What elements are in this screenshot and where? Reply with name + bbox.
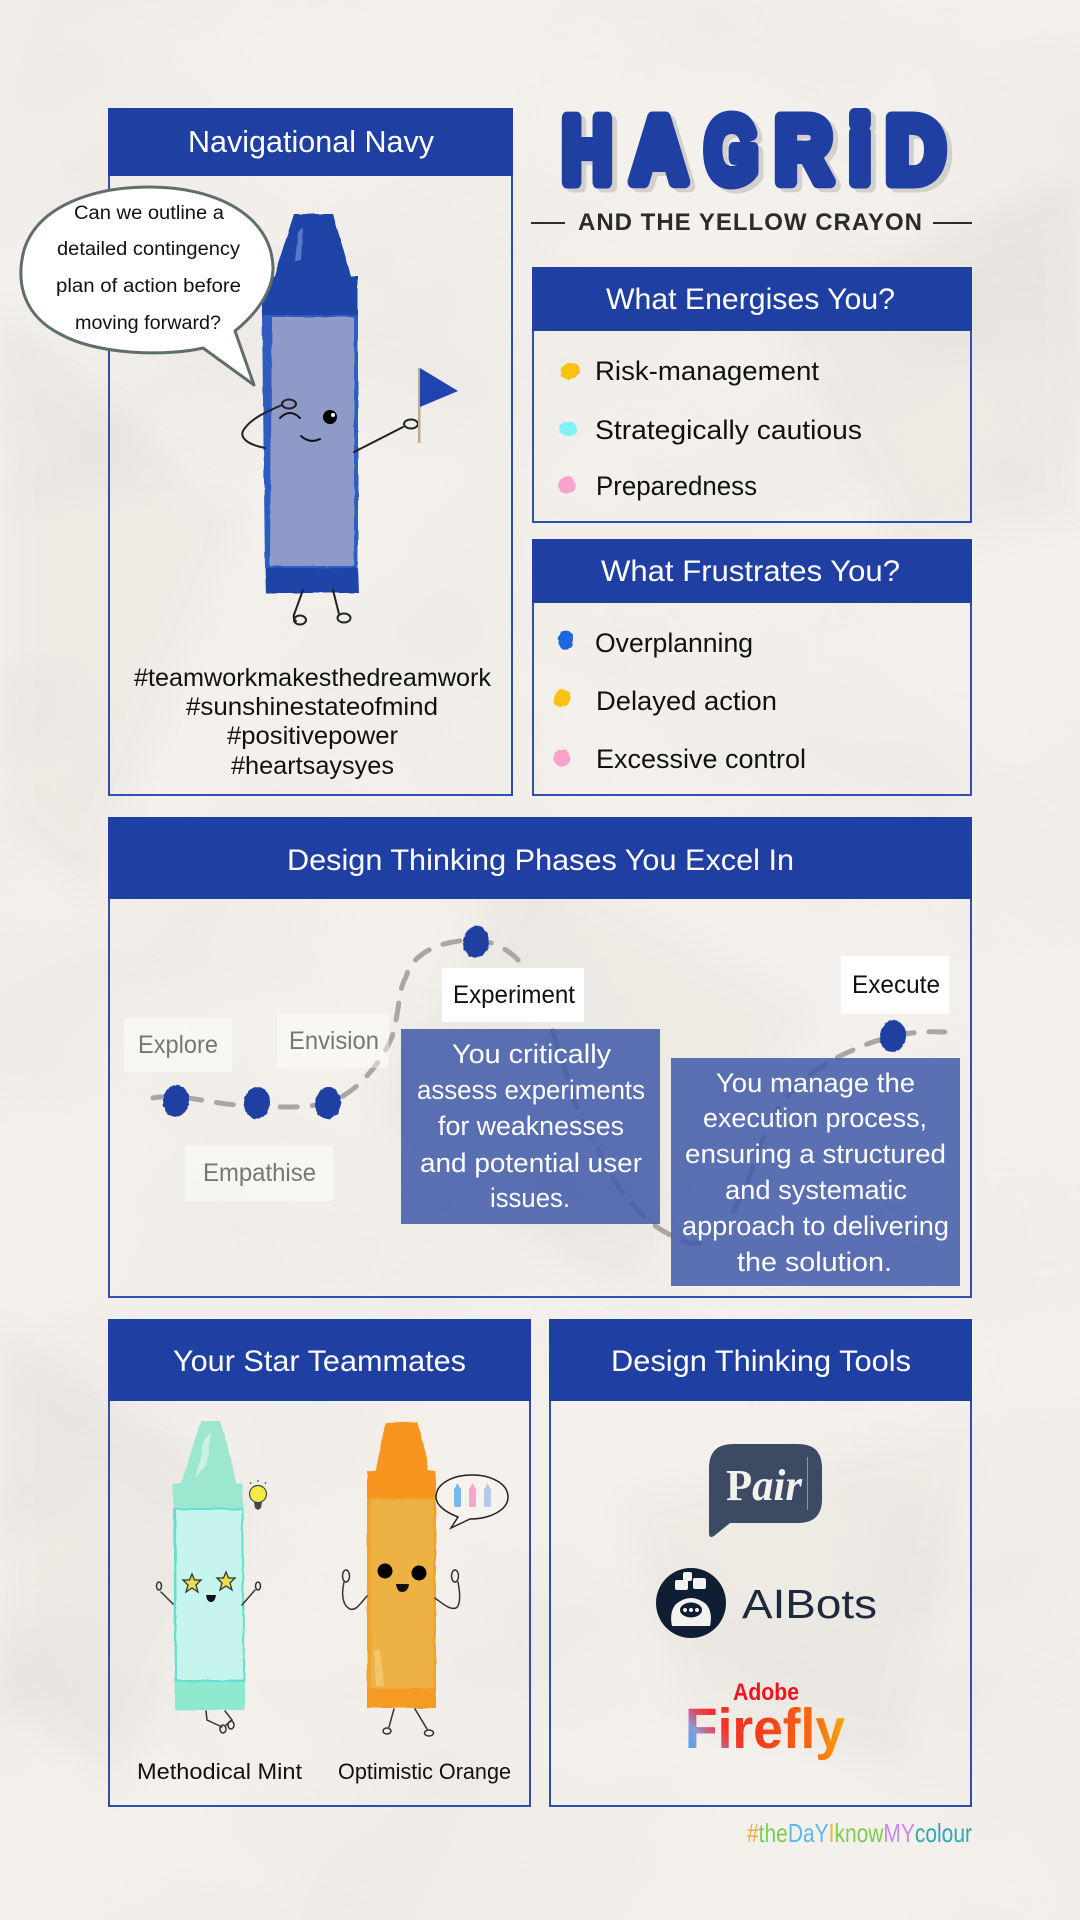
text block: hashtags: #heartsaysyes [231,752,394,780]
markers: phase dots [161,924,908,1121]
logo: Pair [709,1444,822,1537]
callout: experiment description: assess experiments [417,1075,645,1105]
callout: speech bubble [21,187,273,385]
text block: hashtags [134,664,492,780]
face [183,1572,235,1602]
title: HAGRID: D [891,102,950,206]
label: Experiment: Experiment [453,981,575,1009]
callout: execute description: You manage the [716,1068,915,1098]
list: energisers [558,356,862,501]
title: HAGRID: R [775,98,832,202]
title: HAGRID [562,98,950,206]
list: frustrations: Overplanning [595,628,753,658]
list: energisers: Strategically cautious [595,415,862,445]
callout: experiment description [401,1029,660,1224]
logo: AIBots: AIBots [742,1581,877,1627]
callout: speech bubble: detailed contingency [57,239,241,260]
icon: flag [418,368,458,443]
title: HAGRID: i [854,102,876,206]
heading: What Frustrates You?: What Frustrates You? [601,555,900,588]
list: frustrations: Delayed action [596,686,777,716]
logo: Adobe Firefly: Firefly [685,1697,845,1761]
text block: hashtags: #sunshinestateofmind [186,693,438,721]
illustration: orange crayon [342,1422,508,1736]
callout: experiment description: issues. [490,1183,570,1213]
panel: Design Thinking Tools [549,1319,972,1806]
list: energisers: Risk-management [595,356,820,386]
title: HAGRID: R [780,102,837,206]
heading: Navigational Navy: Navigational Navy [188,124,434,159]
logo: Adobe Firefly: Firefly [685,1697,845,1761]
icon: thought bubble with crayons [436,1475,508,1528]
heading: Design Thinking Phases You Excel In: Design Thinking Phases You Excel In [287,844,794,877]
label: Optimistic Orange: Optimistic Orange [338,1759,511,1784]
hashtag footer: #theDaYIknowMYcolour [747,1818,972,1848]
title: HAGRID: A [631,98,687,202]
list: frustrations: Excessive control [596,744,806,774]
callout: execute description: approach to delivering [682,1211,949,1241]
callout: execute description: and systematic [725,1175,907,1205]
title: HAGRID: G [705,98,758,202]
label: Methodical Mint: Methodical Mint [137,1759,302,1784]
panel: Navigational Navy [21,108,513,795]
callout: execute description: ensuring a structured [685,1139,946,1169]
text block: hashtags: #teamworkmakesthedreamwork [134,664,492,692]
label: Explore: Explore [138,1031,218,1059]
face [280,410,337,441]
list: energisers: Preparedness [596,471,757,501]
text block: hashtags: #positivepower [227,722,398,750]
callout: execute description: the solution. [737,1247,892,1277]
subtitle: AND THE YELLOW CRAYON [578,209,922,236]
title: HAGRID: A [636,102,692,206]
heading: Design Thinking Tools: Design Thinking Tools [611,1345,911,1378]
logo: AIBots [656,1568,877,1638]
arms and legs [342,1570,460,1736]
callout: speech bubble: Can we outline a [74,203,224,224]
label: Explore [124,1018,232,1072]
callout: experiment description: for weaknesses [438,1111,624,1141]
callout: experiment description: and potential user [420,1148,642,1178]
title: HAGRID: H [567,102,617,206]
heading: What Energises You?: What Energises You? [606,283,895,316]
title: HAGRID: i [849,98,871,202]
logo: Pair: Pair [726,1461,803,1510]
label: Execute: Execute [852,971,940,999]
illustration: mint crayon [156,1421,266,1733]
title: HAGRID: D [886,98,945,202]
logo: Adobe Firefly: Adobe [733,1679,799,1706]
label: Envision [277,1014,389,1068]
panel: What Frustrates You? [532,539,972,795]
label: Envision: Envision [289,1027,379,1055]
panel: What Energises You? [532,267,972,522]
chart: dashed journey path [153,940,945,1243]
panel: Design Thinking Phases [108,817,972,1297]
title: HAGRID: H [562,98,612,202]
list: frustrations [551,628,806,774]
label: Empathise [185,1146,333,1201]
arms and legs [242,400,418,624]
title: HAGRID: G [710,102,763,206]
icon: light bulb [250,1480,266,1510]
callout: speech bubble: plan of action before [56,276,241,297]
face [378,1564,426,1592]
callout: execute description [671,1058,960,1286]
callout: experiment description: You critically [452,1039,612,1069]
heading: Your Star Teammates: Your Star Teammates [173,1345,466,1378]
callout: execute description: execution process, [703,1103,927,1133]
label: Execute [841,956,949,1014]
panel: Your Star Teammates [108,1319,531,1806]
arms and legs [156,1582,260,1733]
label: Experiment [442,968,584,1022]
label: Empathise: Empathise [203,1159,316,1187]
callout: speech bubble: moving forward? [75,313,221,334]
illustration: navy crayon [242,214,458,624]
